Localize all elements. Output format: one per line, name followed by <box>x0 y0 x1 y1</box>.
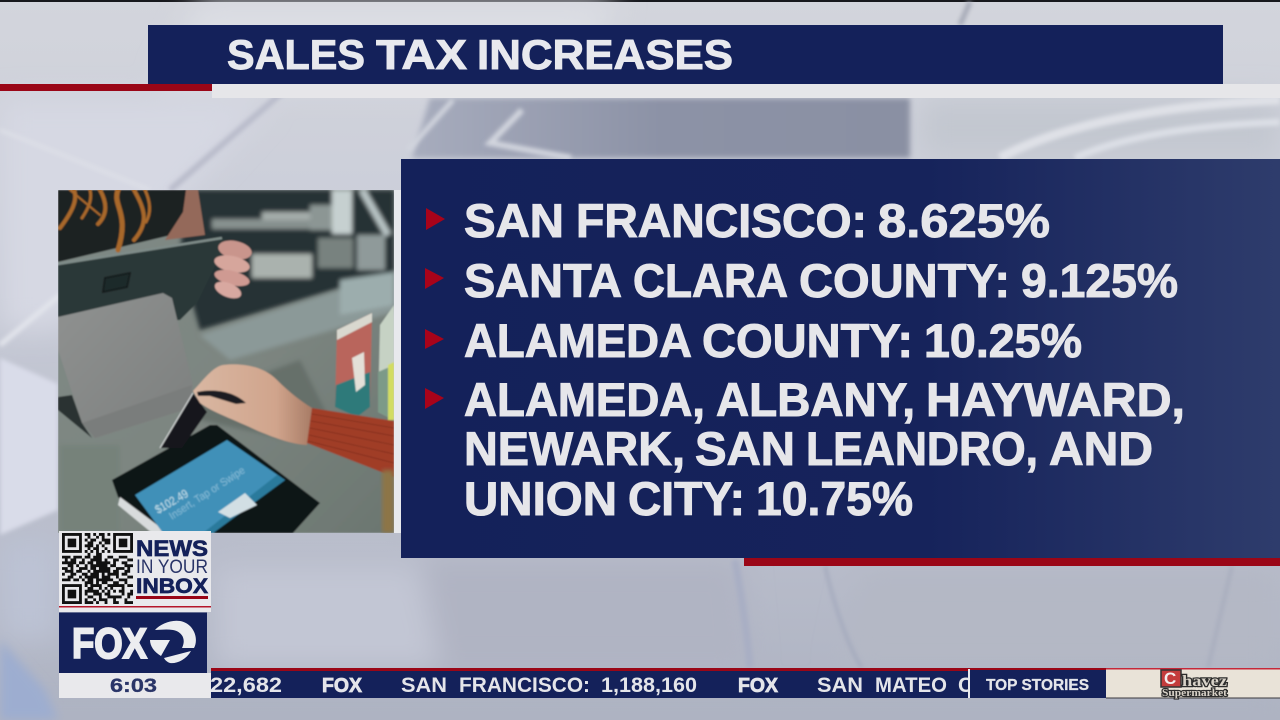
newsletter text <box>136 536 208 598</box>
ticker text: 1,188,160 <box>601 674 697 697</box>
clock <box>59 673 211 698</box>
newsletter qr promo <box>59 531 211 612</box>
fox 2 logo <box>59 612 207 673</box>
rate: listed cities: HAYWARD, <box>926 373 1185 426</box>
sponsor: chavez supermarket: C <box>1164 669 1176 688</box>
rate: listed cities: LEANDRO, <box>806 422 1038 475</box>
fox 2 logo: FOX <box>72 620 147 668</box>
title: sales tax increases <box>227 31 733 78</box>
rate: alameda county: 10.25% <box>924 314 1082 367</box>
panel: sales tax rates <box>401 159 1280 566</box>
accent rule under panel <box>744 558 1280 566</box>
rate: listed cities: SAN <box>695 422 795 475</box>
top stories label <box>970 670 1106 698</box>
clock: 6:03 <box>110 676 157 697</box>
photo: card payment at a counter: Insert, Tap or Swipe <box>167 465 247 523</box>
ticker text: FOX <box>738 675 779 697</box>
ticker text: 22,682 <box>210 674 282 697</box>
photo: card payment at a counter <box>58 190 401 533</box>
rate: santa clara county: COUNTY: <box>799 254 1010 307</box>
ticker text: SAN <box>401 674 447 697</box>
title: sales tax increases: SALES <box>227 31 365 78</box>
qr code <box>62 533 133 604</box>
rate: alameda county: COUNTY: <box>702 314 913 367</box>
sponsor: chavez supermarket: havez <box>1182 673 1227 690</box>
newsletter text: IN YOUR <box>136 557 208 578</box>
title bar <box>148 25 1223 84</box>
rate: santa clara county <box>425 254 1178 307</box>
sponsor: chavez supermarket: Supermarket <box>1162 688 1228 699</box>
rate: listed cities <box>425 373 1185 525</box>
sponsor: chavez supermarket <box>1106 668 1280 699</box>
rate: san francisco: 8.625% <box>878 194 1050 247</box>
ticker text: FOX <box>322 675 363 697</box>
rate: listed cities: ALBANY, <box>716 373 915 426</box>
ticker bar <box>210 668 1280 699</box>
photo: card payment at a counter: $102.49 <box>152 486 191 517</box>
ticker text: C <box>958 674 973 697</box>
rate: alameda county: ALAMEDA <box>464 314 692 367</box>
rate: listed cities: ALAMEDA, <box>464 373 705 426</box>
ticker text: SAN <box>817 674 863 697</box>
newsletter text: NEWS <box>136 536 208 561</box>
top stories label: TOP STORIES <box>986 677 1089 694</box>
rate: santa clara county: 9.125% <box>1021 254 1178 307</box>
ticker text <box>211 678 968 696</box>
rate: listed cities: UNION <box>464 472 617 525</box>
title underline: red and white rules <box>0 84 1280 98</box>
rate: alameda county <box>425 314 1082 367</box>
bullet list of rates <box>425 194 1185 525</box>
rate: san francisco <box>426 194 1050 247</box>
rate: listed cities: 10.75% <box>756 472 913 525</box>
title: sales tax increases: TAX <box>376 31 467 78</box>
ticker text: FRANCISCO: <box>459 674 590 697</box>
rate: san francisco: SAN <box>464 194 564 247</box>
rate: santa clara county: CLARA <box>633 254 788 307</box>
rate: santa clara county: SANTA <box>464 254 622 307</box>
rate: listed cities: AND <box>1049 422 1153 475</box>
newsletter text: INBOX <box>136 575 208 598</box>
rate: listed cities: CITY: <box>628 472 745 525</box>
title: sales tax increases: INCREASES <box>477 31 733 78</box>
ticker text: MATEO <box>875 674 947 697</box>
rate: san francisco: FRANCISCO: <box>576 194 867 247</box>
rate: listed cities: NEWARK, <box>464 422 685 475</box>
station bug: newsletter, logo and clock <box>59 531 211 698</box>
